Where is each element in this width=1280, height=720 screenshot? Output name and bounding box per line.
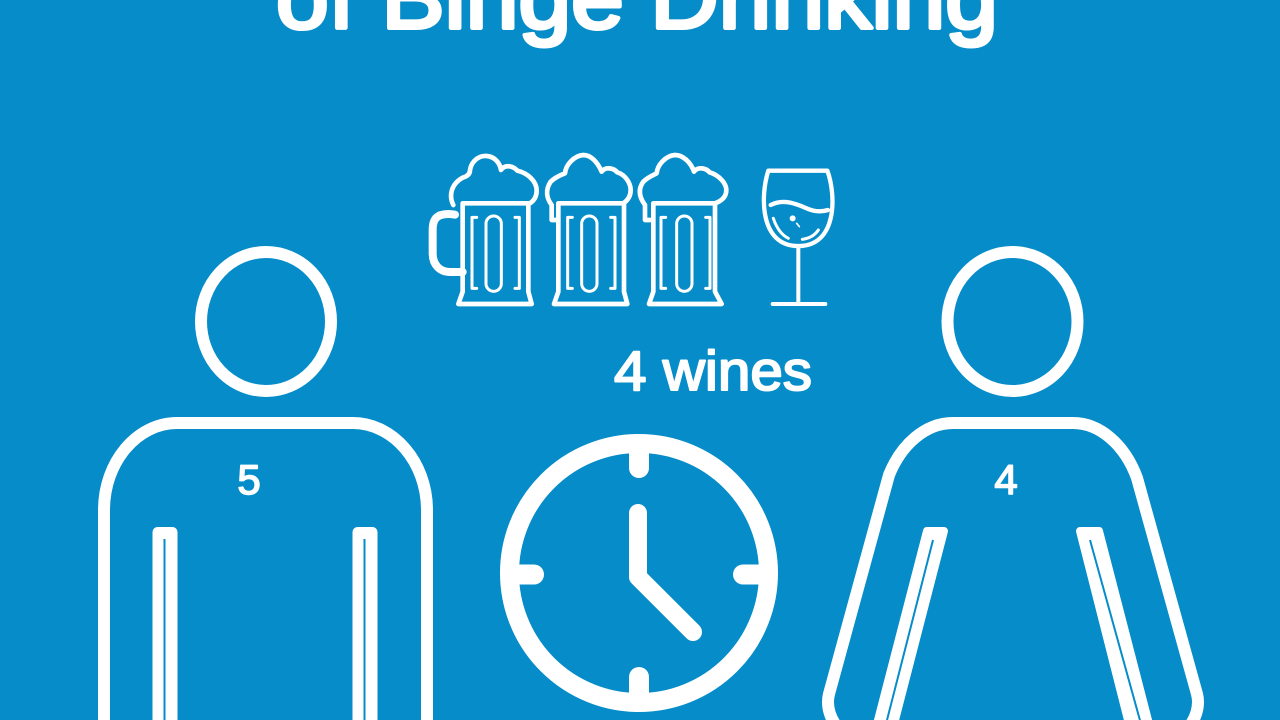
icon: beer mug with handle: [433, 156, 537, 304]
man body: [104, 423, 427, 720]
figure: man: [104, 252, 427, 720]
label: 5 drinks: 5: [237, 456, 261, 503]
label: 4 wines: 4 wines: [614, 339, 812, 402]
clock hands: [638, 513, 693, 632]
woman right arm slot: [1080, 531, 1149, 720]
clock ticks: [516, 450, 762, 696]
icon: clock: [510, 444, 768, 702]
man right arm slot: [352, 527, 378, 720]
woman left arm slot: [877, 531, 944, 720]
icon: wine glass: [764, 171, 832, 304]
icon: beer mug 3: [640, 155, 726, 304]
woman head: [948, 252, 1078, 391]
woman body: [828, 423, 1198, 720]
figure: woman: [828, 252, 1198, 720]
icon: beer mug 2: [547, 155, 631, 304]
man left arm slot: [152, 527, 178, 720]
icon: drinks row: [433, 155, 832, 304]
clock face: [510, 444, 768, 702]
label: 4 drinks: 4: [994, 456, 1018, 503]
man head: [201, 252, 331, 391]
